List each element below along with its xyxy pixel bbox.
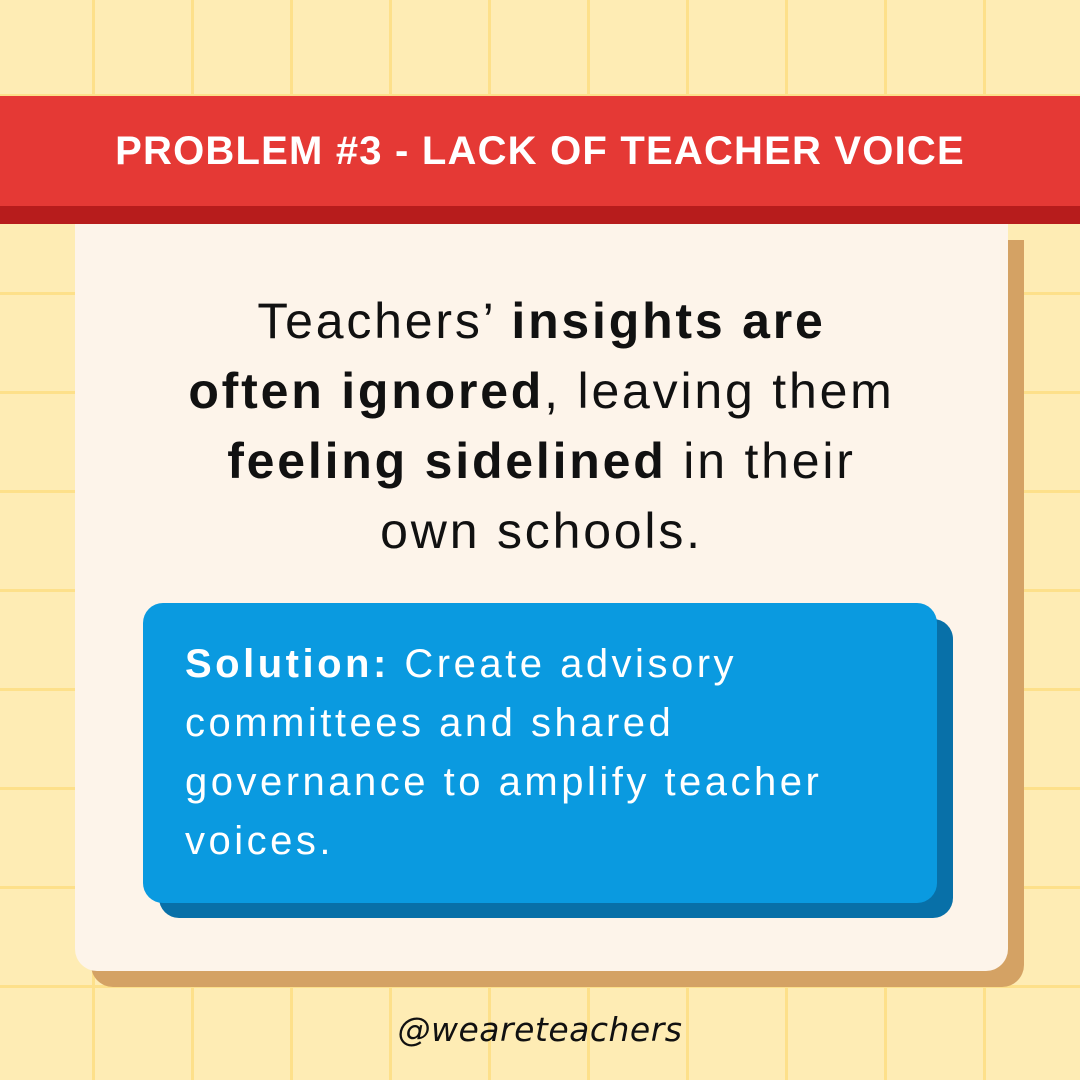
solution text	[185, 642, 822, 863]
solution text: governance to amplify teacher	[185, 760, 822, 804]
problem text: feeling sidelined in their	[227, 433, 856, 489]
solution box	[143, 603, 937, 903]
problem text: own schools.	[380, 503, 703, 559]
header title	[0, 96, 1080, 206]
solution text: voices.	[185, 819, 334, 863]
problem text: Teachers’ insights are	[257, 293, 826, 349]
header title: PROBLEM #3 - LACK OF TEACHER VOICE	[115, 129, 965, 173]
problem text: often ignored, leaving them	[188, 363, 895, 419]
card	[75, 210, 1008, 971]
solution box shadow	[159, 619, 953, 918]
solution text: Solution: Create advisory	[185, 642, 737, 686]
solution text: committees and shared	[185, 701, 674, 745]
handle: @weareteachers	[398, 1010, 682, 1049]
header banner	[0, 96, 1080, 224]
card shadow	[91, 240, 1024, 987]
problem text	[188, 293, 895, 559]
